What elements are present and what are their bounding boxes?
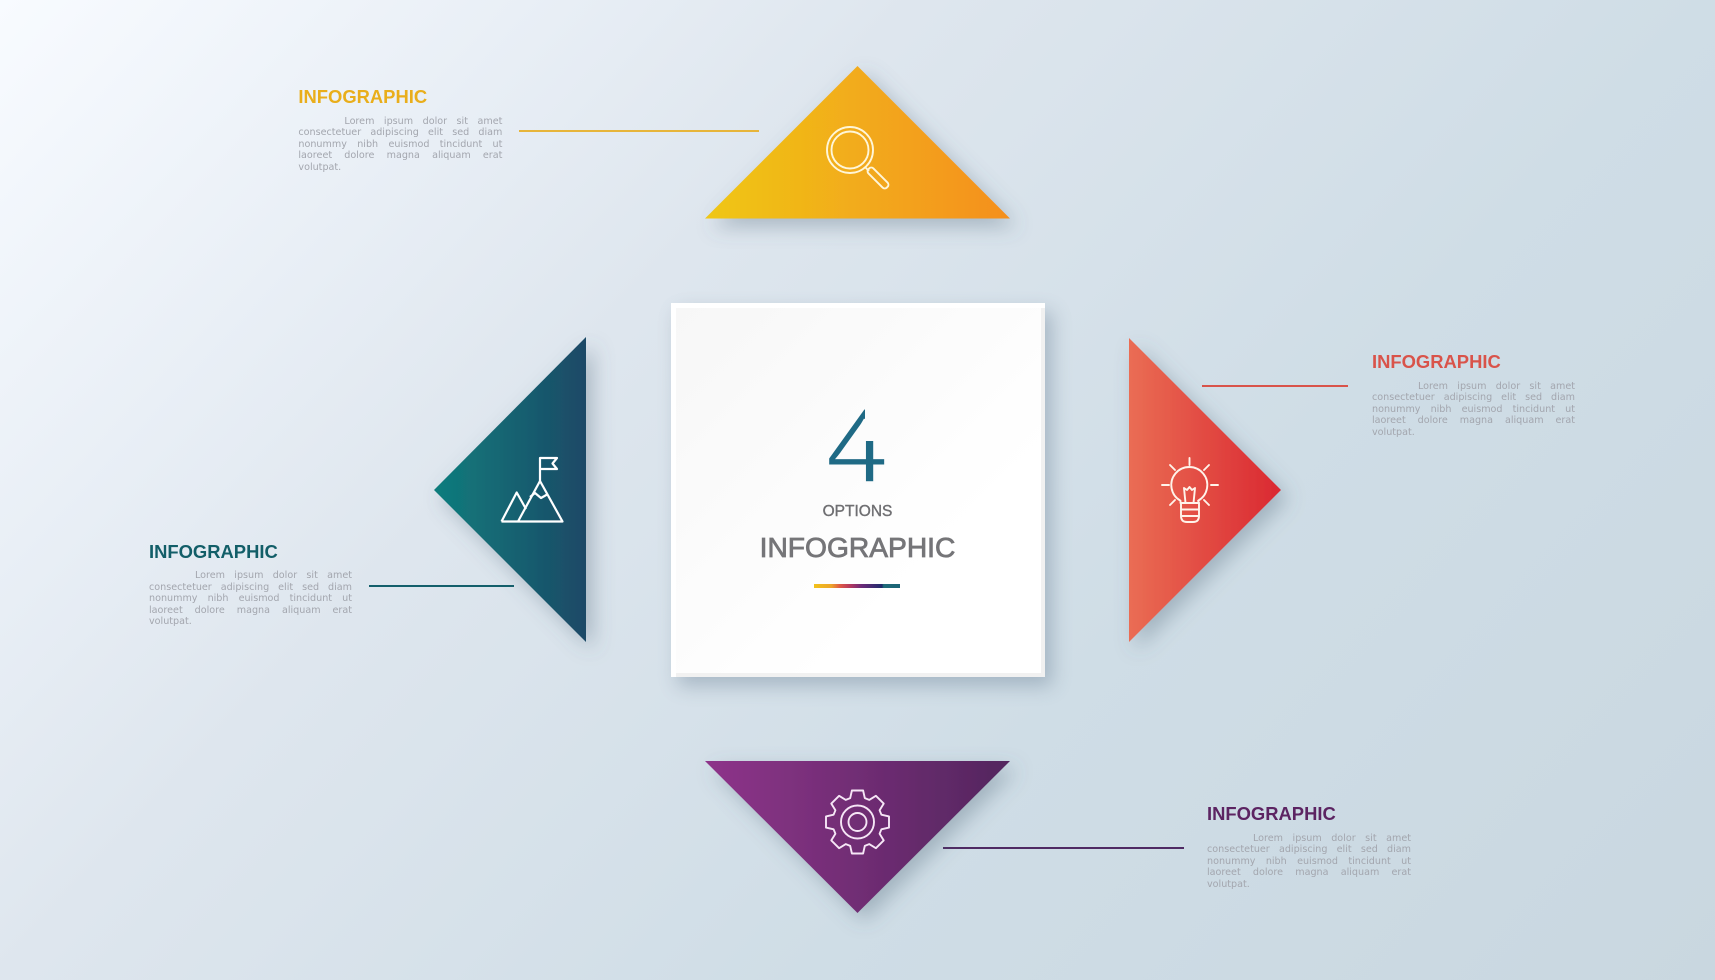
panel: option 3 red xyxy=(1126,338,1575,648)
panel: option 2 teal xyxy=(149,337,603,648)
text block: red description: laoreet dolore magna aliquam erat xyxy=(1372,415,1575,426)
text block: yellow description: nonummy nibh euismod tincidunt ut xyxy=(298,139,502,150)
text block: purple description: volutpat. xyxy=(1207,879,1250,890)
text block: teal description: laoreet dolore magna aliquam erat xyxy=(149,605,352,616)
text block: red description: Lorem ipsum dolor sit amet xyxy=(1418,381,1575,392)
heading: infographic: INFOGRAPHIC xyxy=(760,531,955,563)
connector line: red xyxy=(1202,385,1348,387)
text block: purple description: consectetuer adipiscing elit sed diam xyxy=(1207,844,1411,855)
text block: red description: volutpat. xyxy=(1372,427,1415,438)
triangle with light bulb icon xyxy=(1126,338,1291,648)
text block: purple description: Lorem ipsum dolor sit amet xyxy=(1253,833,1411,844)
connector line: yellow xyxy=(518,130,758,132)
heading: red infographic: INFOGRAPHIC xyxy=(1372,351,1501,372)
text block: red description: consectetuer adipiscing elit sed diam xyxy=(1372,392,1575,403)
text block: red description xyxy=(1372,381,1575,438)
panel: option 4 purple xyxy=(705,760,1411,924)
text block: red description: nonummy nibh euismod tincidunt ut xyxy=(1372,404,1575,415)
text block: teal description xyxy=(149,570,352,627)
icon: light bulb xyxy=(1162,458,1218,522)
heading: teal infographic: INFOGRAPHIC xyxy=(149,541,278,562)
icon: magnifying glass xyxy=(827,127,890,190)
triangle with mountain icon xyxy=(434,337,603,648)
number 4: 4 xyxy=(825,385,888,505)
heading: purple infographic: INFOGRAPHIC xyxy=(1207,803,1336,824)
heading: yellow infographic: INFOGRAPHIC xyxy=(298,86,427,107)
text block: teal description: volutpat. xyxy=(149,616,192,627)
text block: yellow description: laoreet dolore magna aliquam erat xyxy=(298,150,502,161)
text block: yellow description: Lorem ipsum dolor sit amet xyxy=(344,116,502,127)
text block: yellow description: consectetuer adipiscing elit sed diam xyxy=(298,127,502,138)
text block: purple description: laoreet dolore magna aliquam erat xyxy=(1207,867,1411,878)
text block: purple description xyxy=(1207,833,1411,890)
text block: teal description: nonummy nibh euismod tincidunt ut xyxy=(149,593,352,604)
panel: option 1 yellow xyxy=(298,66,1016,236)
text block: teal description: consectetuer adipiscing elit sed diam xyxy=(149,582,352,593)
triangle with magnifier icon xyxy=(705,66,1016,236)
text block: purple description: nonummy nibh euismod tincidunt ut xyxy=(1207,856,1411,867)
panel: center card xyxy=(670,303,1044,677)
connector line: purple xyxy=(943,846,1184,848)
text block: yellow description xyxy=(298,116,502,173)
card inner surface xyxy=(676,308,1044,677)
label: options: OPTIONS xyxy=(823,503,892,520)
text block: yellow description: volutpat. xyxy=(298,162,341,173)
color bar xyxy=(814,584,900,588)
text block: teal description: Lorem ipsum dolor sit amet xyxy=(195,570,352,581)
icon: mountain with flag xyxy=(502,458,562,522)
triangle with gear icon xyxy=(705,760,1016,924)
connector line: teal xyxy=(369,584,514,586)
icon: gear xyxy=(826,790,889,854)
